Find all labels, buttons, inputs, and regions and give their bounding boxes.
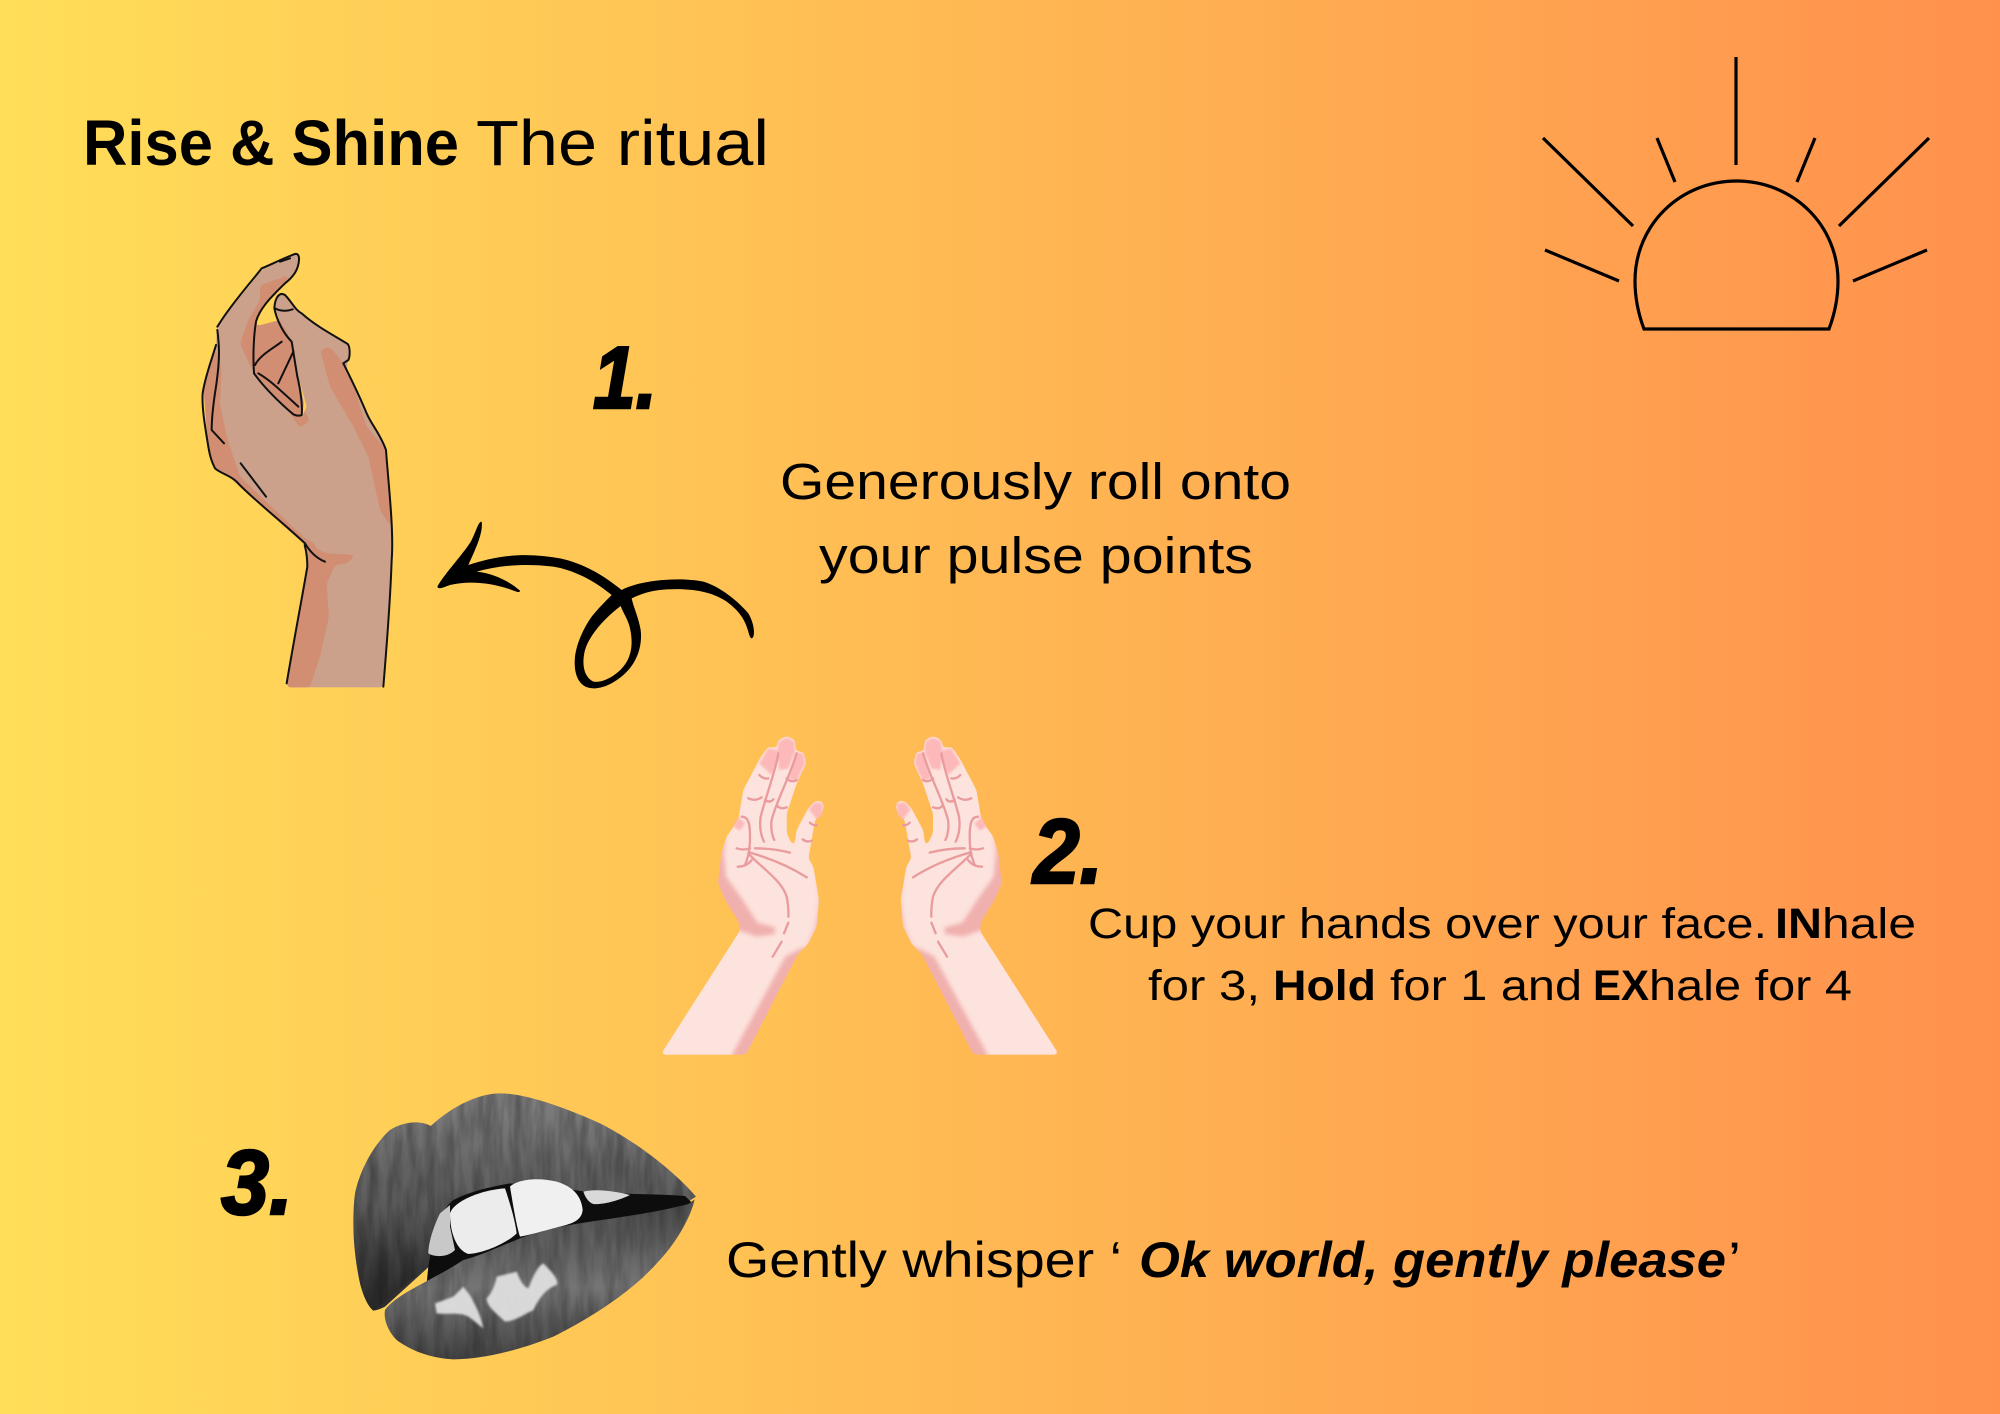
icon: sun line drawing xyxy=(1543,57,1929,329)
text: step 2 instruction: IN xyxy=(1775,900,1822,948)
arrow: curly arrow pointing to wrist xyxy=(437,522,754,688)
text: step 2 instruction: Hold xyxy=(1273,962,1376,1010)
title: The ritual xyxy=(476,107,769,179)
text: step 2 instruction: for 3, xyxy=(1148,962,1260,1010)
text: step 2 instruction: for 1 and xyxy=(1390,962,1582,1010)
text: step 3 instruction: Ok world, gently please xyxy=(1139,1232,1726,1288)
text: step 3 instruction: Gently whisper ‘ xyxy=(726,1232,1122,1288)
text: step 2 instruction: hale for 4 xyxy=(1649,962,1852,1010)
step number 3: 3. xyxy=(221,1132,293,1234)
illustration: glossy lips xyxy=(353,1093,696,1359)
text: step 2 instruction: Cup your hands over your face. xyxy=(1088,900,1767,948)
text: step 1 instruction xyxy=(780,453,1291,584)
text: step 3 instruction xyxy=(726,1232,1741,1288)
left hand xyxy=(661,736,824,1055)
text: step 2 instruction: EX xyxy=(1593,962,1649,1010)
title xyxy=(83,107,769,179)
text: step 2 instruction: hale xyxy=(1822,900,1916,948)
step number 2: 2. xyxy=(1031,801,1103,903)
text: step 2 instruction xyxy=(1088,900,1916,1010)
text: step 1 instruction: your pulse points xyxy=(819,527,1253,584)
right hand xyxy=(896,736,1059,1055)
step number 1: 1. xyxy=(593,328,657,427)
text: step 1 instruction: Generously roll onto xyxy=(780,453,1291,510)
illustration: cupped hands xyxy=(661,736,1059,1055)
illustration: wrist hand xyxy=(202,253,393,687)
title: Rise & Shine xyxy=(83,107,459,179)
text: step 3 instruction: ’ xyxy=(1728,1232,1741,1288)
